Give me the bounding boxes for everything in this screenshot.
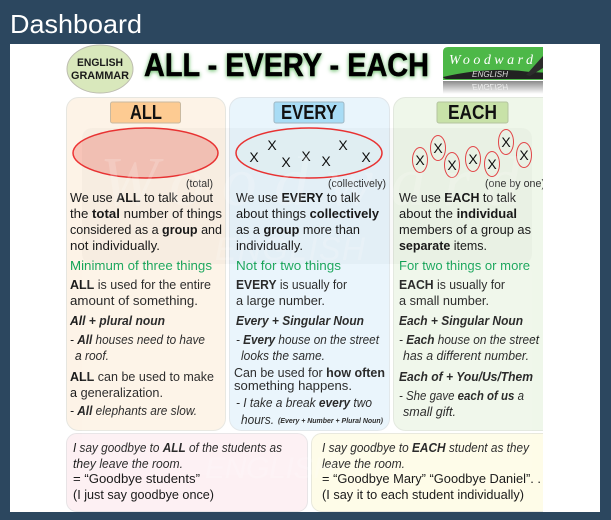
text: how often	[234, 368, 384, 392]
infographic	[66, 45, 558, 512]
pattern: each of + you/us/them: Each of + You/Us/Them	[399, 369, 533, 384]
text: ALL usage: ALL is used for the entire	[70, 277, 211, 292]
rule: for two things or more: For two things or more	[399, 258, 530, 273]
text: EACH usage: a small number.	[399, 293, 489, 308]
pattern: all + plural noun: All + plural noun	[69, 313, 165, 328]
example: take a break: - I take a break every two	[236, 395, 372, 410]
diagram: collective oval: X	[321, 153, 331, 169]
example: houses: - All houses need to have	[70, 332, 205, 347]
example: take a break	[236, 398, 383, 424]
example: take a break: (Every + Number + Plural Noun)	[278, 418, 384, 425]
diagram: collective oval: X	[301, 148, 311, 164]
text: EVERY explanation: We use EVERY to talk	[236, 190, 360, 205]
logo: Woodward English: ENGLISH	[472, 70, 508, 79]
text: ALL explanation: the total number of things	[70, 206, 223, 221]
text: EVERY usage: EVERY is usually for	[236, 277, 348, 292]
diagram: individual ovals	[412, 130, 532, 178]
badge: english grammar: GRAMMAR	[71, 70, 129, 82]
panel: goodbye to all: = “Goodbye students”	[73, 471, 200, 486]
label: ALL	[110, 102, 180, 124]
panel: EVERY	[230, 98, 390, 430]
badge: english grammar: ENGLISH	[77, 57, 123, 69]
text: EVERY usage: a large number.	[236, 293, 325, 308]
text: ALL explanation	[70, 190, 223, 253]
diagram: individual ovals: X	[487, 156, 497, 172]
text: EACH explanation	[399, 190, 531, 253]
pattern: each + singular noun: Each + Singular Noun	[399, 313, 523, 328]
label: EVERY: EVERY	[281, 102, 338, 124]
diagram: collective oval: X	[361, 149, 371, 165]
label: EACH: EACH	[448, 102, 497, 124]
diagram: individual ovals: X	[468, 151, 478, 167]
watermark: faint Woodward English	[82, 128, 532, 485]
panel: goodbye to all: (I just say goodbye once)	[73, 487, 214, 502]
caption: total: (total)	[186, 178, 213, 190]
label: ALL: ALL	[130, 102, 162, 124]
caption: one by one: (one by one)	[485, 178, 545, 190]
text: EACH explanation: about the individual	[399, 206, 517, 221]
panel: goodbye to each	[312, 434, 556, 512]
text: generalization: a generalization.	[70, 385, 163, 400]
panel: goodbye to each: (I say it to each student individually)	[322, 487, 524, 502]
text: EACH explanation: members of a group as	[399, 222, 531, 237]
text: EVERY explanation: individually.	[236, 238, 303, 253]
example: every house: - Every house on the street	[236, 332, 380, 347]
example: houses	[70, 334, 204, 360]
text: how often: Can be used for how often	[234, 365, 385, 380]
text: EACH usage: EACH is usually for	[399, 277, 506, 292]
logo: Woodward English	[443, 47, 543, 93]
text: EACH explanation: We use EACH to talk	[399, 190, 516, 205]
diagram: collective oval: X	[281, 154, 291, 170]
diagram: individual ovals: X	[447, 157, 457, 173]
pattern: every + singular noun: Every + Singular Noun	[236, 313, 364, 328]
example: each house: - Each house on the street	[399, 332, 540, 347]
diagram: individual ovals: X	[501, 134, 511, 150]
panel: goodbye to all: I say goodbye to ALL of the students as	[73, 440, 282, 455]
panel: goodbye to each: = “Goodbye Mary” “Goodbye Daniel”. .	[322, 471, 541, 486]
diagram: collective oval	[236, 128, 382, 178]
text: generalization	[70, 369, 214, 400]
example: elephants: - All elephants are slow.	[70, 403, 197, 418]
diagram: individual ovals: X	[415, 152, 425, 168]
watermark: faint Woodward English: ENGLISH	[205, 452, 335, 485]
text: ALL explanation: We use ALL to talk about	[70, 190, 213, 205]
example: every house: looks the same.	[241, 348, 325, 363]
example: small gift: small gift.	[403, 404, 456, 419]
logo: Woodward English: Woodward	[449, 53, 534, 68]
rule: minimum of three things: Minimum of three things	[70, 258, 212, 273]
watermark: faint Woodward English: Woodward	[100, 144, 521, 221]
example: houses: a roof.	[75, 348, 109, 363]
text: how often: something happens.	[234, 378, 352, 393]
rule: not for two things: Not for two things	[236, 258, 342, 273]
panel: ALL	[66, 98, 226, 430]
caption: collectively: (collectively)	[328, 178, 386, 190]
diagram: individual ovals: X	[519, 147, 529, 163]
text: ALL usage	[70, 277, 211, 308]
example: small gift	[400, 390, 524, 418]
diagram: total oval	[73, 128, 218, 178]
example: take a break: hours.	[241, 412, 274, 427]
example: small gift: - She gave each of us a	[399, 388, 524, 403]
panel: goodbye to all: they leave the room.	[73, 456, 183, 471]
watermark: faint Woodward English: ENGLISH	[215, 231, 366, 267]
title: ALL - EVERY - EACH	[144, 47, 429, 83]
panel: goodbye to each: leave the room.	[322, 456, 405, 471]
diagram: collective oval: X	[267, 137, 277, 153]
example: each house	[400, 334, 540, 360]
panel: goodbye to all	[66, 434, 308, 512]
text: generalization: ALL can be used to make	[70, 369, 214, 384]
text: ALL usage: amount of something.	[70, 293, 198, 308]
panel: EACH	[394, 98, 558, 430]
text: ALL explanation: not individually.	[70, 238, 160, 253]
text: EVERY usage	[236, 280, 347, 308]
text: EVERY explanation: as a group more than	[236, 222, 360, 237]
text: ALL explanation: considered as a group and	[70, 222, 222, 237]
diagram: collective oval: X	[338, 137, 348, 153]
logo: Woodward English: ENGLISH	[472, 82, 508, 91]
badge: english grammar	[67, 45, 133, 93]
page heading: Dashboard	[10, 9, 142, 39]
text: EACH usage	[400, 280, 505, 305]
panel: goodbye to each: I say goodbye to EACH student as they	[322, 440, 530, 455]
text: EACH explanation: separate items.	[399, 238, 487, 253]
example: each house: has a different number.	[403, 348, 529, 363]
text: EVERY explanation	[236, 190, 380, 253]
diagram: collective oval: X	[249, 149, 259, 165]
example: every house	[236, 334, 380, 360]
diagram: individual ovals: X	[433, 140, 443, 156]
text: EVERY explanation: about things collectively	[236, 206, 380, 221]
